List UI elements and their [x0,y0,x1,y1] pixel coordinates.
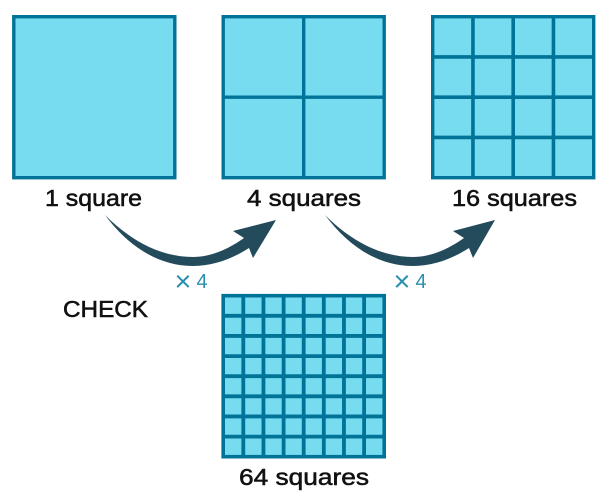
label: 16 squares: 16 squares [452,185,577,211]
arrow: 1 to 4 [105,215,276,266]
label: 64 squares: 64 squares [239,464,369,490]
multiplier: first times 4: × [174,266,191,298]
multiplier: second times 4: 4 [416,271,426,293]
square: 16 squares [433,17,594,178]
square: 1 square [14,17,175,178]
label: 4 squares: 4 squares [247,185,361,211]
multiplier: first times 4 [174,266,208,298]
multiplier: first times 4: 4 [196,271,208,293]
square: 4 squares [223,17,384,178]
multiplier: second times 4 [394,266,426,298]
arrow: 4 to 16 [325,215,495,266]
label: CHECK: CHECK [63,296,149,322]
label: 1 square: 1 square [45,185,142,211]
square: 64 squares [223,296,384,457]
multiplier: second times 4: × [394,266,410,298]
